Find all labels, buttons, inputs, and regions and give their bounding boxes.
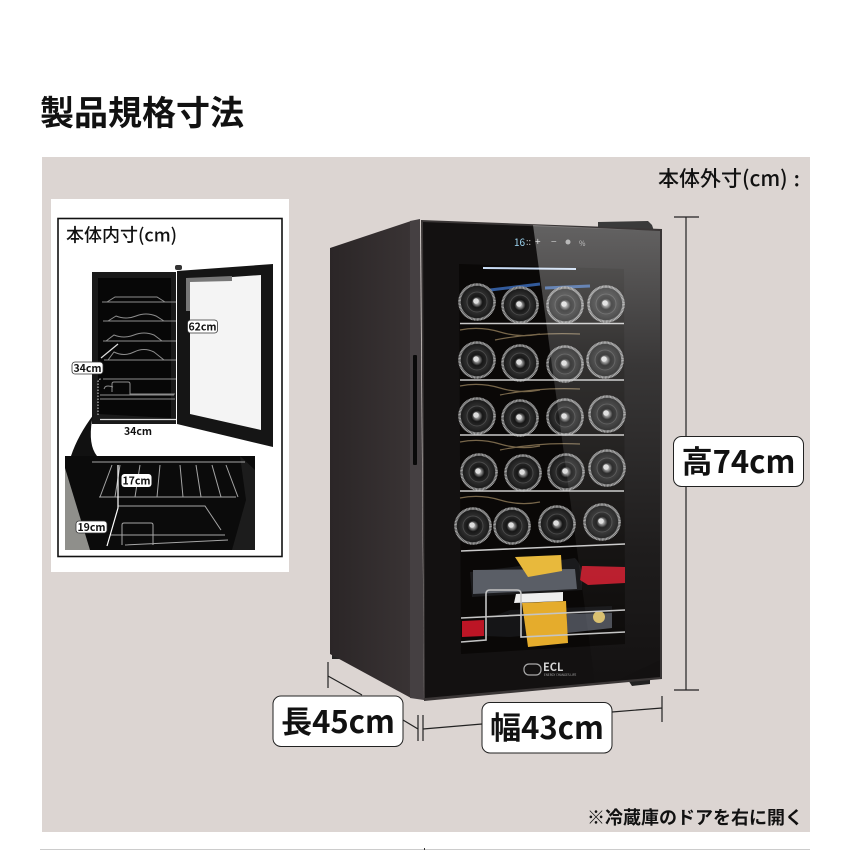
control display: + xyxy=(535,233,541,248)
shelf cradle wires xyxy=(460,328,580,504)
measure: 34cm width xyxy=(100,420,176,439)
door edge xyxy=(410,219,424,700)
glass window xyxy=(459,264,625,654)
depth dimension line xyxy=(328,662,418,741)
panel: dimensions background xyxy=(42,157,810,832)
upper bottle xyxy=(470,555,625,597)
height dimension line xyxy=(674,217,699,690)
top handle xyxy=(598,221,654,231)
wine fridge xyxy=(330,219,662,701)
label: depth 45cm: 長45cm xyxy=(281,697,395,742)
blue light glow xyxy=(490,284,590,290)
shelves xyxy=(460,324,625,551)
bottom rule xyxy=(40,848,810,850)
measure: 34cm depth: 34cm xyxy=(73,361,102,376)
cabinet open view xyxy=(92,272,176,424)
measure: 34cm width: 34cm xyxy=(124,424,152,439)
label: width 43cm: 幅43cm xyxy=(490,703,604,748)
title: 製品規格寸法 xyxy=(40,86,244,135)
control display: 16 xyxy=(514,234,526,249)
label: 17cm: 17cm xyxy=(122,474,151,488)
bottom rack xyxy=(461,590,625,642)
footnote: ※冷蔵庫のドアを右に開く xyxy=(587,804,803,830)
bottle rows xyxy=(454,284,626,544)
zoom pointer xyxy=(71,414,97,456)
width dimension line xyxy=(423,696,662,741)
lower bottle xyxy=(462,592,612,647)
interior heading: 本体内寸(cm) xyxy=(66,222,177,248)
door xyxy=(421,220,662,701)
door handle xyxy=(413,355,417,465)
control display: :: xyxy=(526,235,531,248)
panel: interior dimensions inset xyxy=(51,199,289,572)
logo: ECL: ENERGY CHANGES LIFE xyxy=(544,673,576,677)
label: 62cm: 62cm xyxy=(188,320,217,334)
dotted shelf outline xyxy=(98,379,101,415)
control display: % xyxy=(579,239,586,249)
control display xyxy=(514,233,586,249)
control display: − xyxy=(551,233,557,248)
outer dimensions label: 本体外寸(cm) : xyxy=(658,163,800,193)
interior light xyxy=(483,268,576,269)
label: height 74cm: 高74cm xyxy=(682,437,795,482)
glass reflection xyxy=(533,225,660,690)
feet xyxy=(332,652,650,686)
open door xyxy=(175,264,273,447)
side panel xyxy=(330,221,411,698)
measure: 34cm depth xyxy=(72,344,118,376)
label: 19cm: 19cm xyxy=(77,520,106,535)
zoomed shelf photo xyxy=(65,456,255,550)
logo: ECL: ECL xyxy=(543,659,563,675)
logo: ECL xyxy=(524,659,576,677)
